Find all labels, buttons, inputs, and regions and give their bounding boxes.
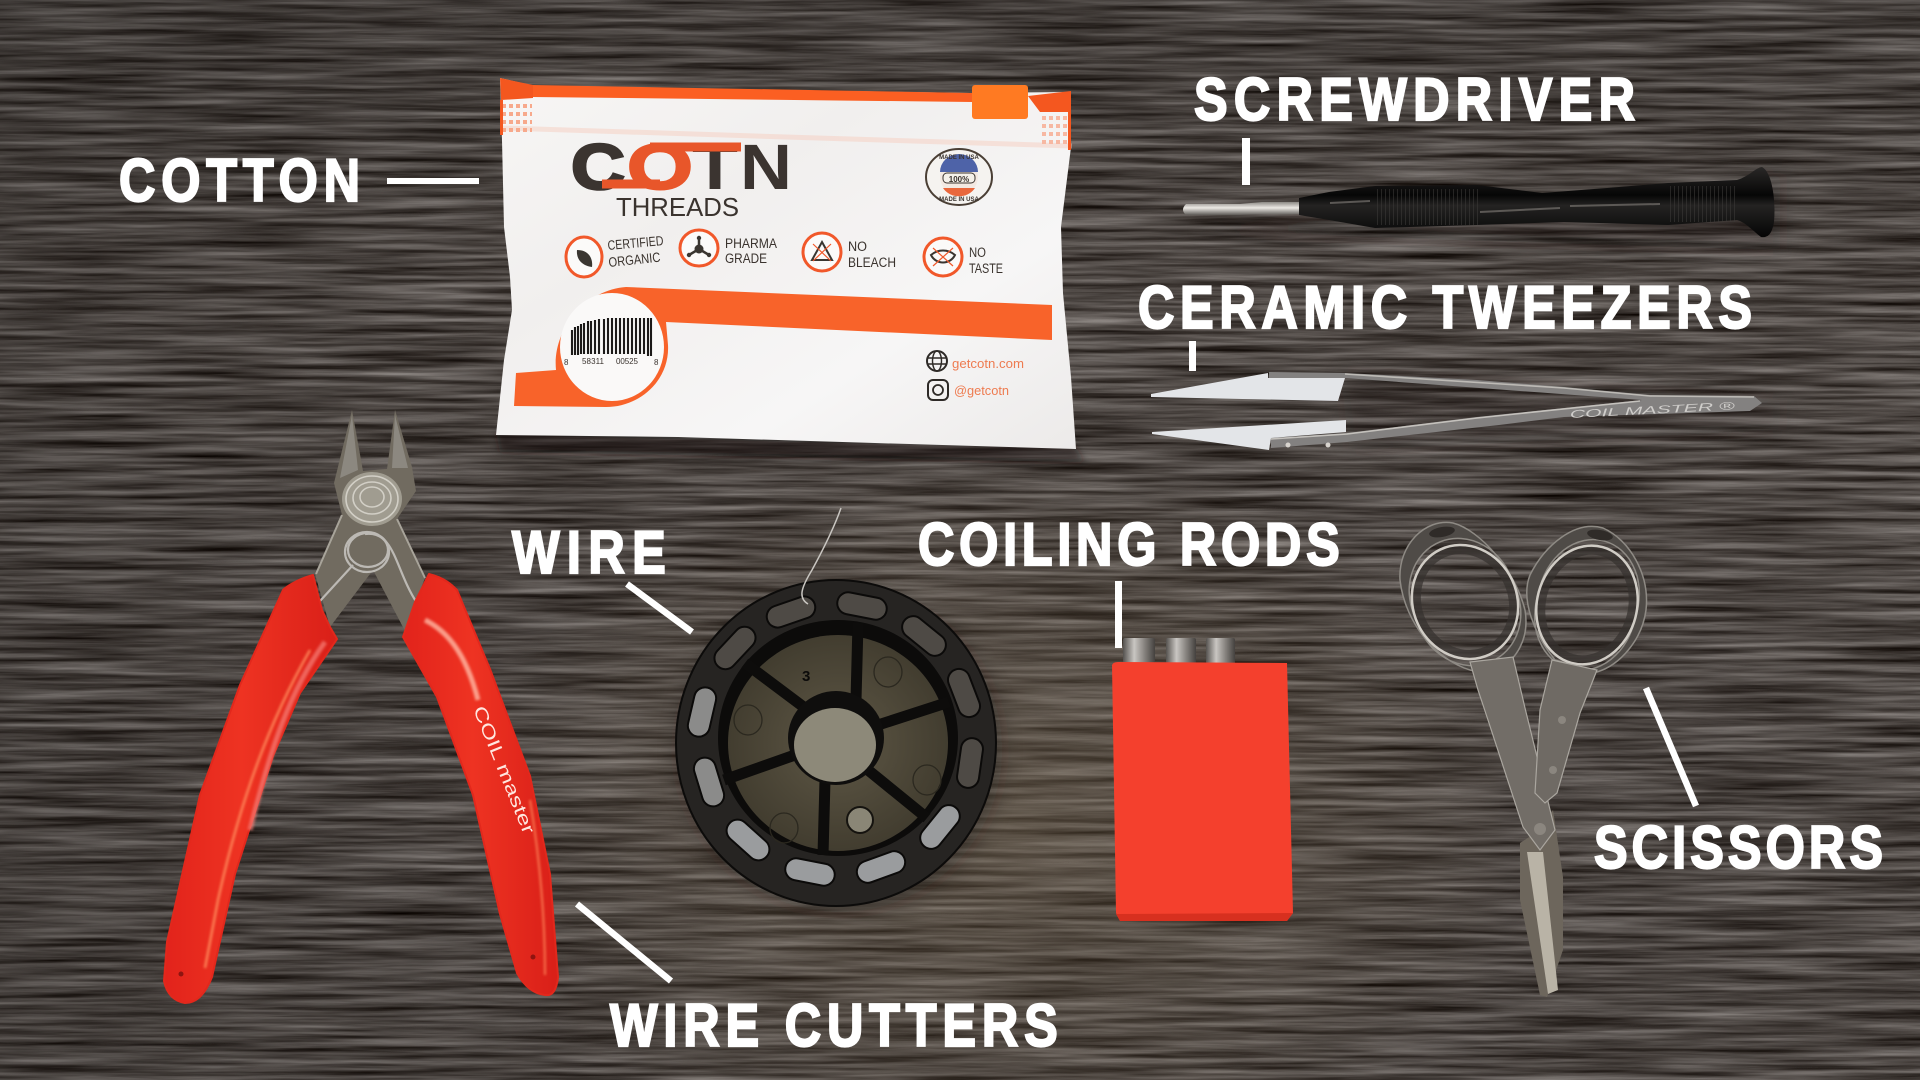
handle brand text: COIL master [469,703,539,837]
label: wire cutters [577,904,1058,1059]
spool shadow [678,588,1002,912]
website line: getcotn.com [952,356,1024,371]
made in USA seal: MADE IN USA [939,155,979,161]
label: scissors [1594,688,1883,881]
feature badge: no taste: TASTE [969,261,1003,276]
label: wire cutters: WIRE CUTTERS [610,992,1058,1059]
screwdriver shaft [1183,202,1300,215]
feature badge: certified organic [566,233,664,277]
spool inner well [718,620,958,856]
screwdriver handle [1299,167,1774,237]
feature badge: pharma grade: GRADE [725,251,767,266]
label: ceramic tweezers [1138,274,1752,371]
feature badge: no taste [924,238,1003,276]
label: wire: WIRE [512,519,666,586]
website line [927,351,1024,371]
instagram line [928,380,1009,400]
wire spool [676,508,1002,912]
label: scissors: SCISSORS [1594,814,1883,881]
label: ceramic tweezers: CERAMIC TWEEZERS [1138,274,1752,341]
feature badge: pharma grade [680,230,777,266]
barcode circle [560,293,664,401]
spool dimples [734,657,941,843]
COTN logo [571,131,792,203]
bag shadow [496,432,1085,462]
label: coiling rods: COILING RODS [918,511,1340,578]
made in USA seal: MADE IN USA [939,197,979,203]
label: screwdriver: SCREWDRIVER [1194,66,1635,133]
right finger loop [1527,526,1647,672]
spool hub [788,691,884,785]
lower ceramic tip [1152,420,1346,450]
rod tops [1123,638,1235,664]
made in USA seal [926,149,992,205]
barcode: 8 [564,358,569,367]
spool hole [847,807,873,833]
coiling rods [1112,638,1293,921]
right handle [403,574,558,995]
upper ceramic tip [1151,373,1345,401]
left scissor arm [1470,657,1555,850]
right scissor arm [1535,660,1597,803]
loose wire end [802,508,841,604]
COTN logo: C [571,131,625,203]
cutter blades and head [315,410,425,631]
tweezers brand text: COIL MASTER ® [1570,400,1737,421]
spool outer flange [676,580,996,906]
screwdriver [1183,167,1780,250]
THREADS wordmark: THREADS [616,192,739,222]
label: coiling rods [918,511,1340,648]
ceramic tweezers [1151,372,1780,450]
scissors [1393,522,1651,997]
barcode [564,318,659,367]
feature badge: no bleach: BLEACH [848,255,896,270]
left finger loop [1400,522,1526,672]
barcode: 8 [654,358,659,367]
COTN logo: T [692,131,738,203]
bag body [496,78,1076,449]
feature badge: certified organic: CERTIFIED [607,233,664,253]
barcode: 58311 [582,357,605,366]
barcode: 00525 [616,357,639,366]
feature badge: no bleach: NO [848,239,867,254]
COTN logo: N [740,131,792,203]
return spring [320,532,417,603]
label: wire [512,519,692,632]
label: cotton [119,147,479,214]
red rod case [1112,662,1293,921]
scissor blades [1520,810,1563,997]
feature badge: no bleach [803,233,896,271]
COTN logo: O [627,131,693,203]
zip strip and mesh corners [500,78,1072,150]
label: cotton: COTTON [119,147,360,214]
instagram line: @getcotn [954,383,1009,398]
left handle [164,575,337,1003]
feature badge: no taste: NO [969,245,986,260]
zip slider [972,85,1028,119]
made in USA seal: 100% [949,175,969,184]
pivot [342,472,402,526]
panel: cotton bag [496,78,1085,462]
tweezers shadow [1340,372,1780,450]
feature badge: pharma grade: PHARMA [725,236,777,251]
spool spokes [724,623,949,855]
orange ribbon [514,287,1052,407]
wire cutters [164,410,558,1003]
screwdriver knurling highlights [1377,204,1735,207]
tweezers steel body [1269,372,1762,448]
feature badge: certified organic: ORGANIC [608,250,661,270]
label: screwdriver [1194,66,1635,185]
spool slots [686,590,984,888]
spool number: 3 [802,668,810,685]
